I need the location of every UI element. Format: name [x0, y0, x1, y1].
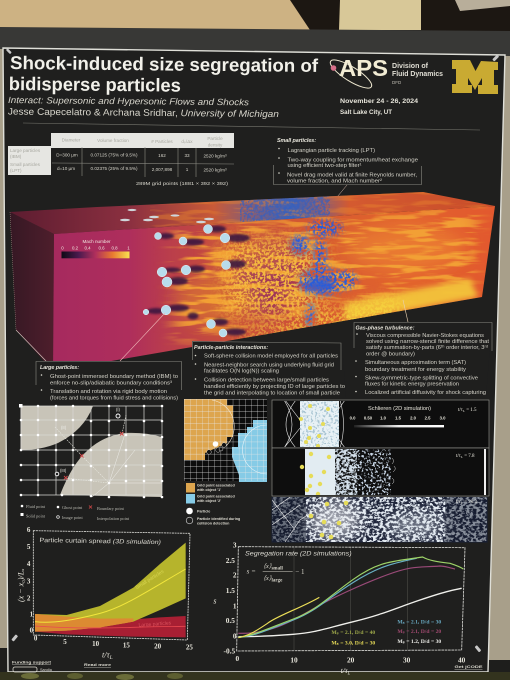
- equation: ⟨x⟩: [263, 575, 271, 582]
- table of particle properties: D=300 µm: [56, 152, 78, 158]
- table of particle properties: Particle: [207, 136, 223, 141]
- colorbar: Mach number: 0.6: [98, 246, 105, 250]
- legend: collision detection: with object '2': [196, 499, 221, 503]
- legend: immersed boundary point types: Solid point: [26, 514, 46, 518]
- footer: funding and links: Read more: [84, 663, 111, 667]
- chart: segregation rate: s: [213, 596, 216, 605]
- chart: particle curtain spread: 15: [123, 641, 130, 649]
- colorbar: Mach number: 0.8: [111, 246, 118, 250]
- panel: large particles: enforce no-slip/adiabatic boundary conditions³: [50, 380, 172, 386]
- chart: particle curtain spread: 10: [92, 640, 100, 648]
- legend: simulation cases: Mₛ = 1.2, D/d = 30: [397, 639, 441, 645]
- chart: particle curtain spread: 25: [186, 643, 193, 651]
- table of particle properties: 2520 kg/m³: [204, 154, 227, 158]
- curve: Ms=2.1, D/d=30: [238, 558, 417, 637]
- panel: small particles: Lagrangian particle tracking (LPT): [288, 148, 375, 154]
- blue small-particle curtain: [290, 220, 357, 327]
- table of particle properties: dₚ/Δx: [181, 139, 193, 144]
- legend: collision detection: Particle identified during: [197, 517, 240, 521]
- band overlap: [35, 614, 133, 632]
- table of particle properties: d=10 µm: [57, 166, 75, 171]
- curve: Ms=3.0, D/d=30: [238, 597, 319, 638]
- equation: ⟨x⟩: [263, 563, 271, 570]
- panel: gas-phase turbulence: solved using narrow-stencil finite difference that: [366, 339, 490, 345]
- logo: APS Division of Fluid Dynamics: DFD: [392, 80, 402, 85]
- yellow band along the lower right edge: [345, 279, 478, 322]
- panel: Schlieren t/tau = 1.5: L: [463, 409, 465, 413]
- panel: small particles: using efficient two-step filter¹: [288, 163, 362, 169]
- table of particle properties: 33: [184, 153, 190, 158]
- panel: particle-particle interactions: Nearest-neighbor search using underlying fluid grid: [204, 362, 334, 368]
- chart: segregation rate: Segregation rate (2D simulations): [245, 552, 352, 558]
- chart: particle curtain spread: 2: [27, 594, 31, 602]
- panel: Schlieren t/tau = 20: [272, 497, 488, 542]
- panel: Schlieren t/tau = 1.5: 1.5: [395, 416, 402, 420]
- table of particle properties: 2,007,898: [152, 167, 173, 172]
- panel: Schlieren t/tau = 7.8: = 7.8: [463, 454, 475, 459]
- colorbar: Mach number: 0.4: [84, 246, 91, 250]
- chart: segregation rate: -0.5: [224, 646, 235, 655]
- panel: Schlieren t/tau = 1.5: 2.5: [425, 416, 431, 420]
- floor strip: [0, 672, 510, 680]
- panel: large particles: Large particles:: [40, 365, 79, 371]
- 3D simulation box: Mach number field with particles: [10, 190, 500, 371]
- legend: simulation cases: Mₛ = 2.1, D/d = 40: [331, 630, 375, 636]
- table of particle properties: 289M grid points (1881 × 392 × 392): [136, 181, 228, 187]
- smooth colour zones: [175, 226, 465, 325]
- logo: APS Division of Fluid Dynamics: Division of: [392, 63, 429, 70]
- chart: segregation rate: 40: [458, 655, 466, 664]
- panel: Schlieren t/tau = 1.5: 3.0: [440, 416, 446, 420]
- panel: gas-phase turbulence: Localized artificial diffusivity for shock capturing: [365, 390, 486, 396]
- chart: particle curtain spread: [16, 526, 193, 661]
- panel: gas-phase turbulence: Skew-symmetric-type splitting of convective: [365, 376, 478, 382]
- equation: − 1: [295, 568, 305, 576]
- panel: Schlieren t/tau = 20: t/τ: [456, 500, 461, 505]
- panel: large particles: Translation and rotation via rigid body motion: [50, 389, 167, 395]
- panel: particle-particle interactions: the grid and interpolating to location of small particle: [204, 390, 340, 396]
- panel: Schlieren t/tau = 20: = 20.3: [463, 500, 478, 505]
- particle wakes: [147, 226, 250, 336]
- diagram: immersed boundary ghost-point method: (I): [116, 407, 121, 412]
- panel: Schlieren t/tau = 7.8: L: [461, 455, 463, 459]
- colorbar: Mach number: 0: [61, 246, 64, 250]
- panel: particle-particle interactions: Collision detection between large/small particles: [204, 378, 329, 384]
- panel: gas-phase turbulence: order @ boundary): [366, 352, 415, 358]
- logo: APS Division of Fluid Dynamics: Fluid Dynamics: [392, 71, 443, 78]
- equation: [247, 562, 305, 583]
- title: bidisperse particles: [9, 73, 181, 96]
- diagram: immersed boundary ghost-point method: (II): [61, 425, 67, 430]
- orange and yellow streaks: [175, 205, 480, 340]
- chart: particle curtain spread: 0: [34, 635, 38, 643]
- table of particle properties: Small particles: [10, 162, 41, 167]
- chart: segregation rate: 30: [403, 655, 411, 664]
- panel: small particles: Two-way coupling for momentum/heat exchange: [288, 158, 418, 164]
- legend: immersed boundary point types: Interpolation point: [97, 516, 130, 521]
- logo: APS Division of Fluid Dynamics: [327, 55, 443, 93]
- colorbar: Mach number: Mach number: [82, 239, 111, 244]
- panel: particle-particle interactions: [192, 341, 346, 397]
- chart: particle curtain spread: t/τ: [102, 650, 110, 659]
- table of particle properties: Volume fraction: [97, 138, 129, 143]
- legend: collision detection: with object '1': [196, 488, 221, 492]
- chart: particle curtain spread: 5: [63, 638, 67, 646]
- panel: gas-phase turbulence: Viscous compressible Navier-Stokes equations: [366, 333, 484, 339]
- chart: particle curtain spread: 3: [27, 577, 31, 585]
- chart: segregation rate: 2.5: [226, 556, 235, 565]
- panel: Schlieren t/tau = 1.5: = 1.5: [465, 408, 477, 413]
- panel: small particles: [274, 138, 422, 208]
- panel: Schlieren t/tau = 1.5: [272, 400, 489, 448]
- legend: immersed boundary point types: Boundary point: [97, 506, 125, 511]
- legend: immersed boundary point types: Ghost point: [62, 505, 83, 510]
- panel: Schlieren t/tau = 7.8: [272, 448, 489, 496]
- table of particle properties: Diameter: [62, 138, 81, 142]
- panel: gas-phase turbulence: Simultaneous approximation term (SAT): [365, 360, 466, 366]
- chart: segregation rate: 0: [233, 631, 237, 640]
- legend: immersed boundary point types: Fluid point: [26, 504, 46, 509]
- panel: small particles: Novel drag model valid at finite Reynolds number,: [287, 172, 417, 178]
- panel: Schlieren t/tau = 20: L: [461, 501, 463, 505]
- legend: immersed boundary point types: Image point: [62, 515, 83, 520]
- chart: particle curtain spread: 6: [27, 526, 31, 534]
- chart: particle curtain spread: Large particles: [138, 620, 172, 629]
- panel: gas-phase turbulence: fluxes for kinetic energy preservation: [365, 382, 459, 388]
- panel: Schlieren t/tau = 1.5: 0.0: [350, 416, 356, 420]
- table of particle properties: (LPT): [10, 168, 22, 173]
- chart: segregation rate: 10: [290, 655, 298, 664]
- logo: University of Michigan block M: [452, 60, 498, 94]
- diagram: collision detection grid: [184, 399, 267, 482]
- chart: segregation rate: [213, 541, 466, 677]
- table of particle properties: 0.02375 (25% of 9.5%): [90, 166, 138, 171]
- session and authors: [8, 95, 279, 119]
- legend: simulation cases: [331, 620, 441, 647]
- legend: simulation cases: Mₛ = 3.0, D/d = 30: [331, 641, 375, 647]
- panel: particle-particle interactions: Soft-sphere collision model employed for all particles: [204, 354, 338, 360]
- logo: APS Division of Fluid Dynamics: APS: [339, 55, 388, 81]
- curve: Ms=2.1, D/d=40: [238, 557, 463, 637]
- equation: large: [271, 578, 283, 583]
- session and authors: Interact: Supersonic and Hypersonic Flows and Shocks: [8, 95, 250, 107]
- curve: Ms=2.1, D/d=20: [238, 566, 455, 633]
- title: [9, 52, 319, 97]
- panel: large particles: [36, 361, 182, 402]
- conference date and place: [340, 98, 418, 116]
- panel: Schlieren t/tau = 1.5: 0.50: [364, 416, 373, 420]
- band: small particles: [35, 543, 186, 632]
- chart: particle curtain spread: 5: [27, 543, 31, 551]
- chart: segregation rate: L: [347, 672, 351, 677]
- chart: segregation rate: 2: [233, 571, 237, 580]
- colorbar: Mach number: 0.2: [72, 246, 79, 250]
- equation: small: [271, 566, 283, 571]
- panel: particle-particle interactions: Particle-particle interactions:: [194, 345, 268, 351]
- chart: particle curtain spread: 0: [30, 627, 34, 635]
- chart: segregation rate: 0: [235, 654, 239, 663]
- table of particle properties: 1: [186, 167, 189, 172]
- chart: segregation rate: 20: [347, 655, 355, 664]
- chart: segregation rate: 3: [233, 541, 237, 550]
- table of particle properties: 2520 kg/m³: [204, 168, 227, 172]
- panel: gas-phase turbulence: Gas-phase turbulence:: [356, 326, 415, 332]
- legend: collision detection: [186, 483, 240, 526]
- footer: funding and links: Get jCODE: [454, 665, 483, 669]
- chart: segregation rate: t/τ: [341, 666, 348, 675]
- conference date and place: November 24 - 26, 2024: [340, 98, 418, 105]
- table of particle properties: 0.07125 (75% of 9.5%): [90, 152, 138, 158]
- panel: Schlieren t/tau = 1.5: 1.0: [380, 416, 387, 420]
- panel: Schlieren t/tau = 7.8: t/τ: [456, 454, 461, 459]
- chart: particle curtain spread: L: [109, 655, 113, 661]
- chart: segregation rate: 1.5: [226, 586, 235, 595]
- conference date and place: Salt Lake City, UT: [340, 109, 392, 116]
- panel: gas-phase turbulence: boundary treatment for energy stability: [365, 367, 466, 373]
- equation: s =: [247, 568, 256, 576]
- chart: segregation rate: 1: [233, 601, 237, 610]
- panel: gas-phase turbulence: [354, 322, 492, 397]
- yellow flecks: [225, 240, 400, 345]
- table of particle properties: density: [208, 142, 223, 148]
- chart: particle curtain spread: 20: [154, 643, 162, 651]
- panel: gas-phase turbulence: satisfy summation-by-parts (6ᵗʰ order interior, 3ʳᵈ: [366, 345, 488, 351]
- footer: funding and links: Funding support: [12, 660, 52, 664]
- chart: particle curtain spread: 4: [27, 560, 31, 568]
- panel: Schlieren t/tau = 1.5: t/τ: [458, 408, 463, 413]
- chart: particle curtain spread: 1: [30, 611, 34, 619]
- diagram: immersed boundary ghost-point method: (III): [60, 468, 67, 473]
- legend: simulation cases: Mₛ = 2.1, D/d = 30: [397, 620, 441, 626]
- legend: collision detection: Particle: [197, 510, 210, 514]
- table of particle properties: [8, 133, 234, 187]
- table of particle properties: # Particles: [151, 139, 173, 144]
- panel: particle-particle interactions: facilitates O(N log(N)) scaling: [204, 368, 279, 374]
- legend: collision detection: collision detection: [197, 522, 230, 526]
- panel: Schlieren t/tau = 1.5: 2.0: [410, 416, 417, 420]
- panel: Schlieren t/tau = 1.5: Schlieren (2D simulation): [368, 406, 431, 412]
- footer: funding and links: [12, 660, 483, 672]
- table of particle properties: 162: [158, 153, 166, 158]
- table of particle properties: Large particles: [10, 148, 41, 153]
- legend: simulation cases: Mₛ = 2.1, D/d = 20: [397, 629, 441, 635]
- panel: small particles: volume fraction, and Mach number²: [287, 178, 382, 184]
- colorbar: Mach number: 1: [127, 246, 130, 250]
- legend: immersed boundary point types: [20, 504, 130, 521]
- table of particle properties: (IBM): [10, 154, 22, 159]
- chart: particle curtain spread: (x − x₀)/Lₓ: [16, 568, 25, 602]
- panel: small particles: Small particles:: [277, 138, 316, 144]
- chart: particle curtain spread: Particle curtain spread (3D simulation): [39, 537, 161, 546]
- title: Shock-induced size segregation of: [10, 52, 319, 76]
- curve: Ms=1.2, D/d=30: [238, 588, 462, 637]
- band: large particles: [35, 614, 186, 637]
- legend: collision detection: Grid point associated: [197, 484, 235, 488]
- chart: segregation rate: 0.5: [226, 616, 235, 625]
- colorbar: Mach number: [61, 239, 130, 258]
- panel: large particles: (forces and torques from fluid stress and collisions): [50, 396, 178, 402]
- footer: funding and links: Sandia: [40, 668, 53, 672]
- panel: large particles: Ghost-point immersed boundary method (IBM) to: [50, 374, 178, 380]
- legend: collision detection: Grid point associated: [197, 494, 235, 498]
- panel: particle-particle interactions: handled efficiently by projecting ID of large particles to: [204, 384, 345, 390]
- diagram: immersed boundary ghost-point method: [19, 404, 163, 498]
- session and authors: Jesse Capecelatro & Archana Sridhar, University of Michigan: [8, 105, 279, 119]
- particles on top face: [120, 209, 214, 223]
- chart: particle curtain spread: Small particles: [135, 568, 166, 591]
- large particles: [143, 224, 230, 337]
